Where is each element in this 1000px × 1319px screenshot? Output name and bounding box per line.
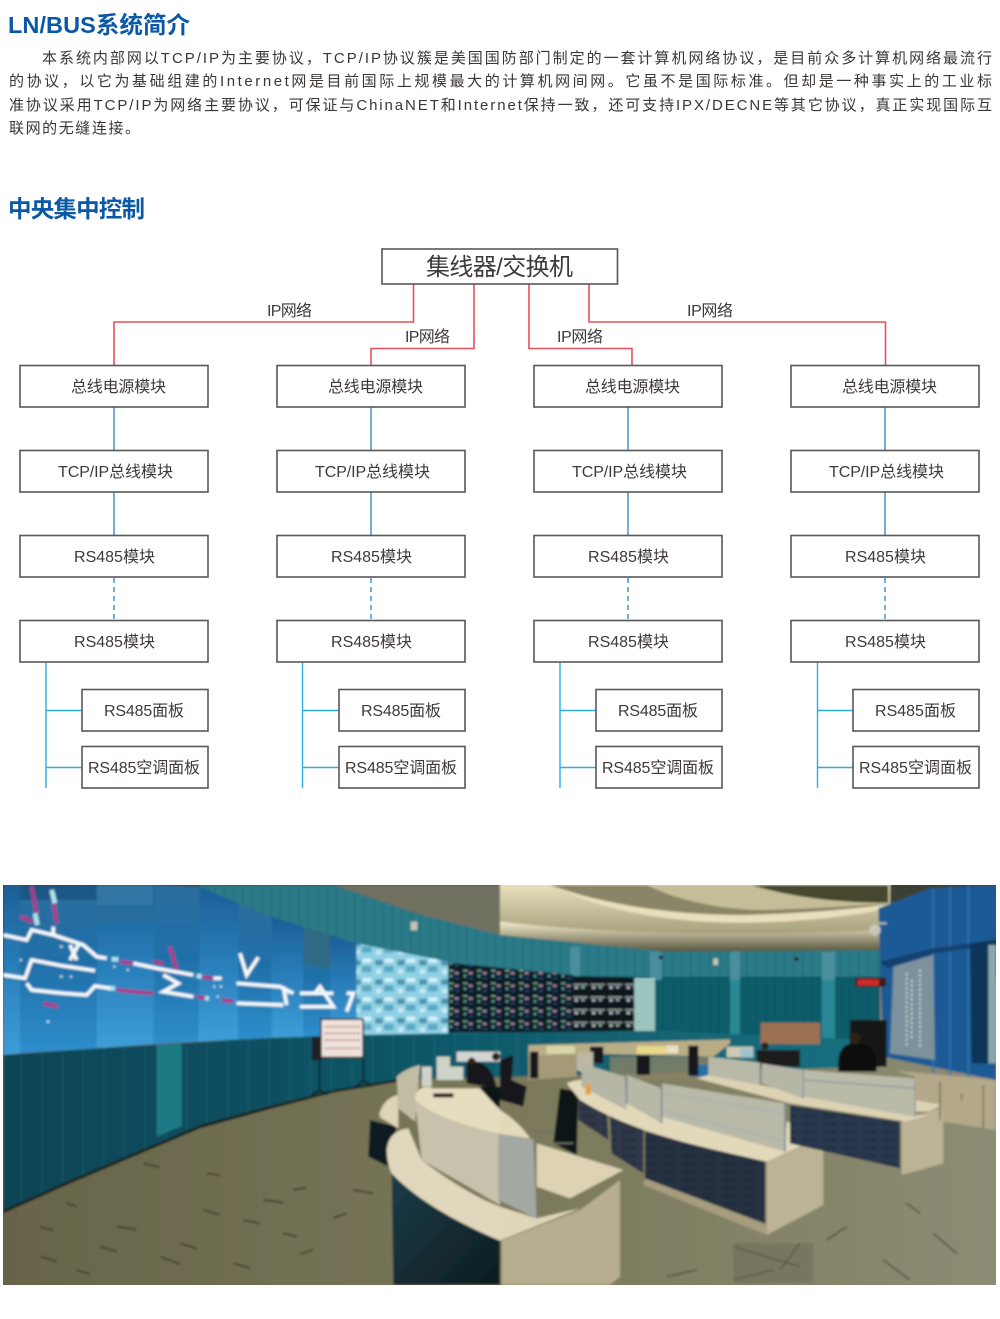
column 3: 总线电源模块 [585, 378, 680, 396]
operators and chairs behind desk 1 [422, 1052, 538, 1107]
IP network labels: IP网络 [267, 301, 312, 320]
column 3: RS485面板 [618, 702, 698, 720]
column 2: RS485模块 [331, 633, 412, 651]
column 3: RS485模块 [588, 548, 669, 566]
video wall: subway track display [3, 885, 357, 1055]
column 4: 总线电源模块 [842, 378, 937, 396]
column 2: RS485模块 [331, 548, 412, 566]
hub / switch box: 集线器/交换机 [426, 254, 573, 281]
floor [3, 978, 996, 1285]
column 1: RS485模块 [74, 633, 155, 651]
column 3 [534, 366, 722, 788]
body paragraph: 的协议，以它为基础组建的Internet网是目前国际上规模最大的计算机网间网。它虽不是国际标准。但却是一种事实上的工业标 [9, 72, 992, 90]
dark monitor wall sections [448, 963, 655, 1033]
column 1: RS485面板 [104, 702, 184, 720]
column 4: RS485模块 [845, 633, 926, 651]
heading: central control: 中央集中控制 [8, 196, 145, 222]
body paragraph [9, 49, 992, 137]
column 1: RS485模块 [74, 548, 155, 566]
CCTV wall section [357, 943, 448, 1035]
column 4: RS485模块 [845, 548, 926, 566]
IP network labels: IP网络 [687, 301, 733, 320]
column 4: RS485空调面板 [859, 759, 972, 777]
column 4 [791, 366, 979, 788]
photo: control room illustration [0, 880, 1000, 1300]
IP network labels: IP网络 [405, 327, 450, 346]
column 1: TCP/IP总线模块 [58, 463, 173, 481]
column 1: RS485空调面板 [88, 759, 200, 777]
desk 2: front-left console [498, 1134, 624, 1285]
column 1: 总线电源模块 [71, 378, 166, 396]
desk 1: foreground curved console [368, 1065, 530, 1285]
column 2: 总线电源模块 [328, 378, 423, 396]
right side blue tower with window [869, 885, 996, 1080]
body paragraph: 准协议采用TCP/IP为网络主要协议，可保证与ChinaNET和Internet保持一致，还可支持IPX/DECNE等其它协议，真正实现国际互 [9, 96, 992, 114]
column 4: RS485面板 [875, 702, 956, 720]
column 2: RS485面板 [361, 702, 441, 720]
IP network labels [267, 301, 733, 346]
column 2: RS485空调面板 [345, 759, 457, 777]
desk 4: rear-right console [697, 1057, 943, 1175]
red IP network links [114, 284, 886, 365]
flip chart on stand [312, 1018, 372, 1095]
body paragraph: 本系统内部网以TCP/IP为主要协议，TCP/IP协议簇是美国国防部门制定的一套计算机网络协议，是目前众多计算机网络最流行 [42, 49, 992, 67]
column 4: TCP/IP总线模块 [829, 463, 944, 481]
column 3: TCP/IP总线模块 [572, 463, 687, 481]
heading: LN/BUS system intro: LN/BUS系统简介 [8, 12, 190, 38]
wall cabinets [897, 1071, 996, 1130]
chair [552, 1088, 580, 1155]
hub / switch box [382, 249, 618, 284]
column 3: RS485模块 [588, 633, 669, 651]
IP network labels: IP网络 [557, 327, 603, 346]
red LED sign, notice board and dark doorway [761, 978, 887, 1067]
column 1 [20, 366, 208, 788]
standing operator [838, 1032, 877, 1072]
lower wall panels [3, 1031, 880, 1213]
upper wall [199, 885, 882, 1042]
column 3: RS485空调面板 [602, 759, 714, 777]
column 2 [277, 366, 465, 788]
background desks and monitors [528, 1039, 800, 1080]
network topology diagram [20, 249, 979, 788]
desk 3: center console [567, 1052, 827, 1235]
body paragraph: 联网的无缝连接。 [9, 120, 140, 137]
ceiling [0, 880, 1000, 980]
column 2: TCP/IP总线模块 [315, 463, 430, 481]
